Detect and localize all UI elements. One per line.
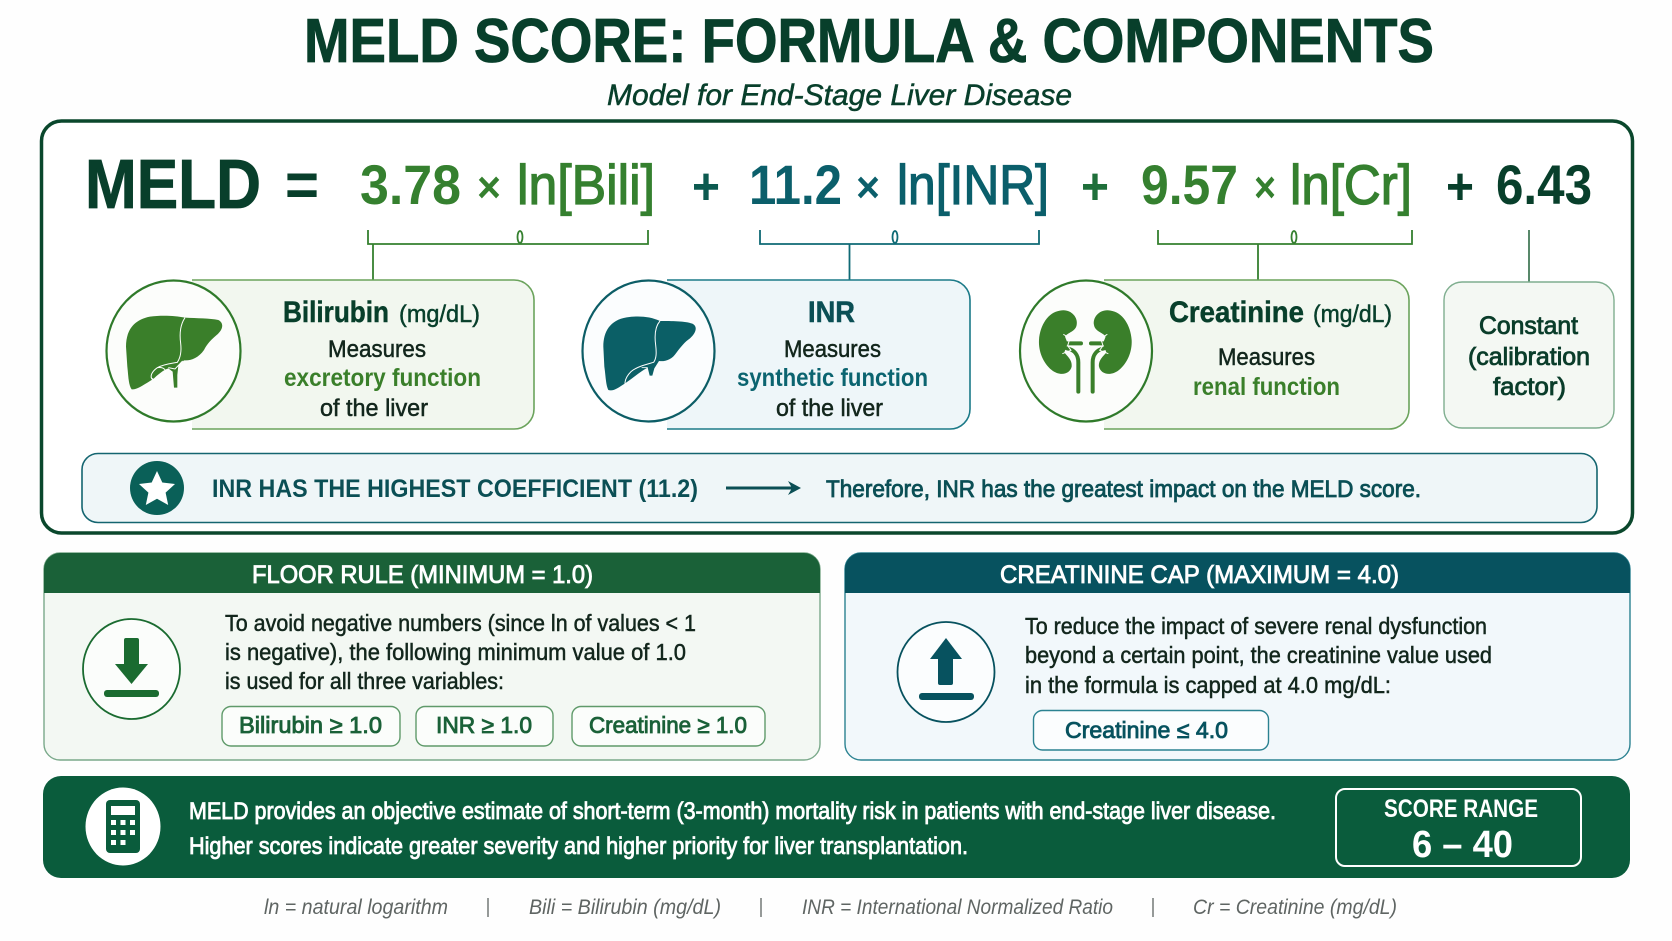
summary text: Higher scores indicate greater severity and higher priority for liver transplantation. — [189, 833, 968, 860]
icon: up arrow to cap — [898, 622, 994, 722]
pill: INR minimum: INR ≥ 1.0 — [436, 712, 532, 738]
icon: calculator — [86, 788, 160, 866]
arrow — [726, 481, 801, 495]
text: floor rule: is used for all three variables: — [225, 668, 504, 694]
icon: star — [130, 461, 184, 515]
text: creatinine cap — [1025, 613, 1492, 698]
summary text — [189, 798, 1276, 860]
panel header: floor rule: FLOOR RULE (MINIMUM = 1.0) — [252, 561, 593, 589]
panel header: creatinine cap: CREATININE CAP (MAXIMUM = 4.0) — [1000, 561, 1399, 589]
card heading: bilirubin: (mg/dL) — [399, 301, 480, 328]
formula: × — [856, 163, 880, 212]
bracket: bilirubin — [368, 230, 648, 281]
card heading: creatinine — [1169, 296, 1392, 329]
panel: creatinine cap — [845, 553, 1630, 760]
formula: MELD — [85, 145, 261, 223]
formula: ln[INR] — [897, 153, 1049, 216]
card heading: bilirubin — [283, 296, 480, 329]
footer: abbreviations legend: INR = International Normalized Ratio — [802, 896, 1113, 919]
panel: formula and components — [42, 121, 1632, 533]
panel: floor rule — [44, 553, 820, 760]
text: creatinine cap: To reduce the impact of severe renal dysfunction — [1025, 613, 1487, 639]
footer: abbreviations legend — [264, 896, 1397, 919]
card heading: creatinine: (mg/dL) — [1313, 301, 1392, 328]
text: creatinine cap: beyond a certain point, the creatinine value used — [1025, 642, 1492, 668]
formula: ln[Cr] — [1290, 153, 1412, 216]
card text: INR: of the liver — [776, 395, 883, 422]
formula: 9.57 — [1141, 153, 1238, 216]
summary text: MELD provides an objective estimate of short-term (3-month) mortality risk in patients with end-stage liver disease. — [189, 798, 1276, 825]
panel header: creatinine cap — [845, 553, 1630, 593]
title: MELD SCORE: FORMULA & COMPONENTS — [304, 7, 1434, 76]
pill: creatinine maximum — [1034, 710, 1268, 750]
card heading: bilirubin: Bilirubin — [283, 296, 389, 329]
formula: ln[Bili] — [517, 153, 655, 216]
text: floor rule: To avoid negative numbers (since ln of values < 1 — [225, 610, 696, 636]
card text: bilirubin: Measures — [328, 336, 426, 363]
formula: 3.78 — [360, 153, 461, 216]
formula: + — [692, 158, 720, 216]
score range box: 6 – 40 — [1412, 824, 1513, 866]
icon: liver (teal) — [582, 280, 714, 422]
footer: abbreviations legend: Bili = Bilirubin (mg/dL) — [529, 896, 721, 919]
footer: abbreviations legend: ln = natural logarithm — [264, 896, 448, 919]
score range box: SCORE RANGE — [1384, 795, 1538, 823]
formula: 6.43 — [1496, 153, 1592, 216]
icon: down arrow to floor — [83, 619, 180, 719]
bracket: creatinine — [1158, 230, 1412, 281]
subtitle: Model for End-Stage Liver Disease — [607, 79, 1072, 112]
card text: creatinine: renal function — [1193, 373, 1340, 401]
formula: = — [285, 151, 319, 220]
callout heading: INR HAS THE HIGHEST COEFFICIENT (11.2) — [212, 475, 698, 503]
bracket: INR — [760, 230, 1039, 281]
connector: constant — [1528, 230, 1530, 282]
card text: INR: synthetic function — [737, 364, 928, 392]
card text: bilirubin — [284, 336, 481, 422]
card: constant: factor) — [1493, 373, 1566, 401]
pill: INR minimum — [416, 706, 553, 746]
card heading: creatinine: Creatinine — [1169, 296, 1304, 329]
score range box — [1336, 789, 1581, 866]
card: creatinine — [1020, 280, 1409, 429]
callout text: Therefore, INR has the greatest impact on the MELD score. — [826, 476, 1421, 503]
formula — [85, 145, 1592, 223]
pill: bilirubin minimum: Bilirubin ≥ 1.0 — [239, 712, 382, 738]
footer: abbreviations legend: Cr = Creatinine (mg/dL) — [1193, 896, 1397, 919]
card text: INR: Measures — [784, 336, 881, 363]
card text: bilirubin: of the liver — [320, 395, 428, 422]
text: floor rule: is negative), the following minimum value of 1.0 — [225, 639, 686, 665]
callout: INR highest coefficient — [82, 454, 1597, 522]
panel header: floor rule — [44, 553, 820, 593]
pill: creatinine minimum: Creatinine ≥ 1.0 — [589, 712, 747, 738]
card text: creatinine — [1193, 344, 1340, 401]
text: floor rule — [225, 610, 696, 694]
formula: × — [477, 163, 501, 212]
formula: + — [1081, 158, 1109, 216]
card text: bilirubin: excretory function — [284, 364, 481, 392]
panel: summary bar — [43, 776, 1630, 878]
pill: creatinine minimum — [572, 706, 765, 746]
card heading: INR: INR — [808, 296, 855, 329]
formula: 11.2 — [749, 153, 842, 216]
card: INR — [582, 280, 970, 429]
formula: + — [1446, 158, 1474, 216]
formula: × — [1254, 163, 1276, 212]
text: creatinine cap: in the formula is capped at 4.0 mg/dL: — [1025, 672, 1391, 698]
pill: creatinine maximum: Creatinine ≤ 4.0 — [1065, 717, 1228, 743]
card: constant: Constant — [1479, 312, 1578, 340]
icon: kidneys — [1020, 280, 1152, 422]
card: bilirubin — [106, 280, 534, 429]
card text: INR — [737, 336, 928, 422]
card text: creatinine: Measures — [1218, 344, 1315, 371]
icon: liver (green) — [106, 280, 240, 422]
pill: bilirubin minimum — [222, 706, 400, 746]
card: constant: (calibration — [1468, 343, 1590, 371]
card: constant — [1444, 282, 1614, 428]
